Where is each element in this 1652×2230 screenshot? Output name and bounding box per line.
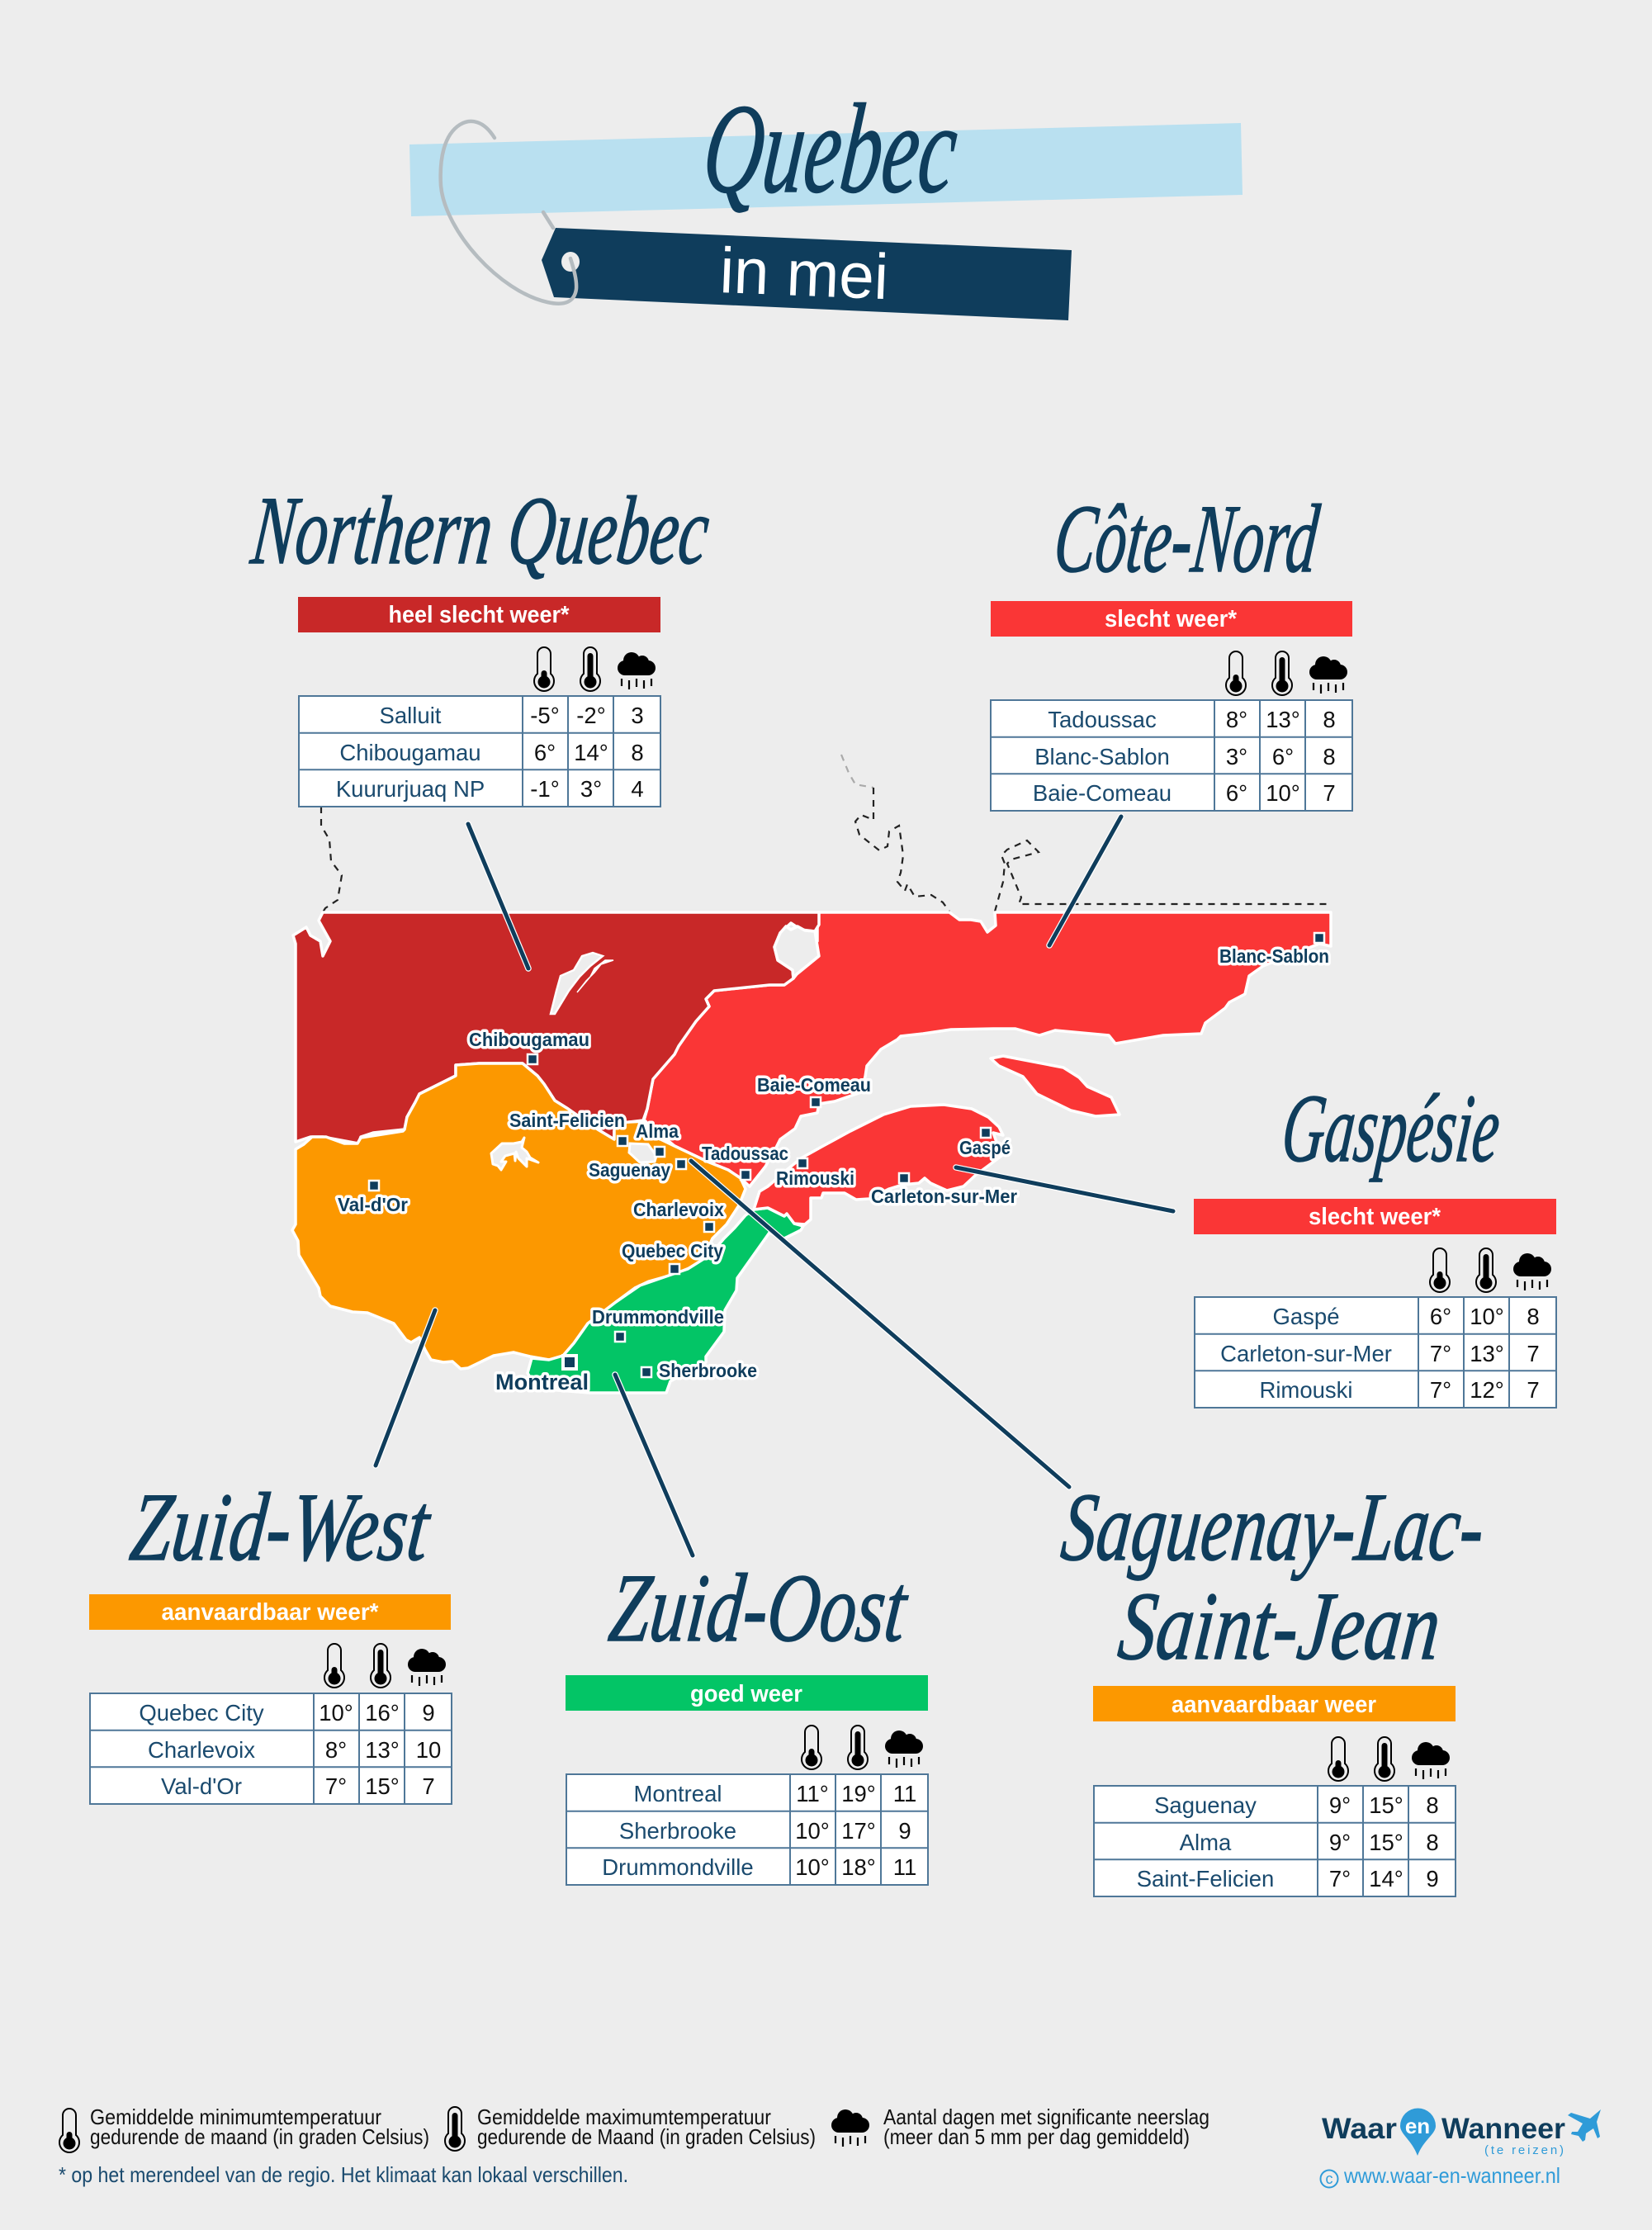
- climate table: 18°: [841, 1854, 876, 1880]
- climate table: 15°: [1369, 1830, 1403, 1855]
- table icons: [1328, 1737, 1450, 1781]
- legend: maximum temperature: gedurende de Maand (in graden Celsius): [477, 2124, 816, 2149]
- border: dashed Labrador east: [995, 840, 1332, 911]
- legend: precipitation: Aantal dagen met significante neerslag: [883, 2105, 1209, 2129]
- leader line: Cote-Nord: [1049, 817, 1121, 945]
- panel: Zuid-Oost: [566, 1554, 928, 1885]
- leader line: Zuid-Oost: [615, 1375, 693, 1555]
- climate table: Montreal: [634, 1781, 722, 1806]
- rating bar: heel slecht weer*: [388, 602, 570, 628]
- climate table: 8: [1323, 707, 1336, 732]
- climate table: 7: [1527, 1341, 1540, 1366]
- leader line: Gaspesie: [956, 1167, 1173, 1211]
- panel: Saguenay-Lac-Saint-Jean: [1057, 1473, 1489, 1896]
- legend: minimum temperature: Gemiddelde minimumtemperatuur: [90, 2105, 381, 2129]
- city labels: Alma: [636, 1120, 679, 1142]
- city labels: Blanc-Sablon: [1219, 945, 1329, 967]
- city labels: Baie-Comeau: [757, 1074, 871, 1096]
- climate table: 6°: [534, 740, 556, 765]
- lake Mistassini: [551, 953, 603, 1014]
- table icons: [802, 1726, 923, 1769]
- leader line: Saguenay: [691, 1161, 1069, 1487]
- climate table: 8: [1426, 1792, 1439, 1818]
- logo tagline: (te reizen): [1484, 2143, 1565, 2157]
- region: Zuid-West and Saguenay: [292, 1063, 746, 1369]
- legend: [59, 2105, 1209, 2187]
- heading: Saguenay-Lac-Saint-Jean: Saguenay-Lac-: [1057, 1473, 1489, 1581]
- city labels: Chibougamau: [469, 1029, 589, 1050]
- panel: Gaspesie: [1194, 1074, 1556, 1408]
- climate table: 3°: [1226, 744, 1247, 769]
- region: Northern Quebec: [293, 912, 819, 1143]
- legend: minimum temperature: [59, 2105, 429, 2152]
- climate table: Sherbrooke: [619, 1818, 736, 1844]
- climate table: Saint-Felicien: [1137, 1866, 1274, 1891]
- climate table: 8: [1323, 744, 1336, 769]
- climate table: [299, 696, 660, 807]
- leader line: Zuid-West: [376, 1310, 435, 1465]
- climate table: Charlevoix: [148, 1737, 255, 1763]
- city labels: Saguenay: [589, 1159, 670, 1181]
- rating bar: aanvaardbaar weer: [1172, 1692, 1376, 1718]
- panel: Cote-Nord: [991, 485, 1352, 811]
- border: dashed Labrador: [855, 788, 949, 911]
- legend: minimum temperature: gedurende de maand (in graden Celsius): [90, 2124, 429, 2149]
- map of Quebec: [292, 755, 1332, 1555]
- climate table: 8°: [325, 1737, 347, 1763]
- table icons: [1430, 1248, 1551, 1292]
- climate table: 9: [1426, 1866, 1439, 1891]
- climate table: 10°: [1470, 1304, 1504, 1329]
- city labels: Charlevoix: [633, 1199, 724, 1220]
- climate table: Quebec City: [139, 1700, 264, 1726]
- title ribbon: [409, 123, 1243, 216]
- climate table: 14°: [574, 740, 608, 765]
- region: Anticosti island: [991, 1056, 1119, 1116]
- climate table: 15°: [365, 1773, 400, 1799]
- climate table: [991, 700, 1352, 811]
- region: Cote-Nord: [644, 912, 1331, 1186]
- climate table: 10: [416, 1737, 441, 1763]
- climate table: Alma: [1180, 1830, 1232, 1855]
- climate table: -5°: [530, 703, 560, 728]
- climate table: 9°: [1329, 1830, 1351, 1855]
- legend: precipitation: [831, 2105, 1209, 2149]
- climate table: 17°: [841, 1818, 876, 1844]
- climate table: 7°: [1430, 1341, 1451, 1366]
- climate table: 10°: [319, 1700, 353, 1726]
- rating bar: aanvaardbaar weer*: [162, 1599, 379, 1626]
- climate table: [1094, 1786, 1456, 1896]
- climate table: 11: [893, 1854, 916, 1880]
- climate table: Gaspé: [1272, 1304, 1340, 1329]
- city labels: Carleton-sur-Mer: [871, 1186, 1017, 1207]
- city labels: [338, 945, 1329, 1394]
- climate table: 12°: [1470, 1377, 1504, 1403]
- climate table: 7: [1323, 780, 1336, 806]
- climate table: 3°: [580, 776, 602, 802]
- climate table: 8: [1527, 1304, 1540, 1329]
- logo text: Waar: [1322, 2113, 1397, 2145]
- logo text: [1322, 2113, 1565, 2145]
- climate table: 16°: [365, 1700, 400, 1726]
- city markers: [369, 933, 1324, 1377]
- climate table: Tadoussac: [1048, 707, 1157, 732]
- climate table: Carleton-sur-Mer: [1220, 1341, 1392, 1366]
- heading: Gaspesie: Gaspésie: [1277, 1074, 1505, 1182]
- climate table: -2°: [576, 703, 606, 728]
- logo: Waar en Wanneer: [1321, 2109, 1601, 2188]
- rating bar: goed weer: [690, 1681, 802, 1707]
- climate table: Salluit: [380, 703, 442, 728]
- heading: Saguenay-Lac-Saint-Jean: Saint-Jean: [1114, 1572, 1446, 1680]
- city labels: Rimouski: [776, 1167, 854, 1189]
- rating bar: [298, 597, 660, 632]
- heading: Quebec: Quebec: [697, 78, 963, 220]
- climate table: 9: [898, 1818, 911, 1844]
- climate table: 14°: [1369, 1866, 1403, 1891]
- climate table: 10°: [795, 1854, 830, 1880]
- lake Albanel: [577, 960, 613, 992]
- string loop: [441, 121, 576, 304]
- James Bay: [774, 926, 819, 978]
- city labels: Sherbrooke: [659, 1360, 757, 1381]
- subtitle: in mei: in mei: [718, 234, 890, 313]
- heading: Zuid-Oost: Zuid-Oost: [604, 1554, 913, 1662]
- climate table: 11: [893, 1781, 916, 1806]
- climate table: 7°: [1430, 1377, 1451, 1403]
- logo pin: [1400, 2109, 1436, 2156]
- heading: Zuid-West: Zuid-West: [125, 1473, 436, 1581]
- climate table: 4: [631, 776, 644, 802]
- border: dashed Labrador faded: [841, 755, 873, 788]
- region: Gaspesie: [754, 1105, 1003, 1224]
- climate table: 13°: [365, 1737, 400, 1763]
- climate table: 10°: [795, 1818, 830, 1844]
- panel: Northern Quebec: [247, 476, 714, 807]
- climate table: Val-d'Or: [161, 1773, 242, 1799]
- city labels: Drummondville: [592, 1306, 724, 1328]
- city labels: Saint-Felicien: [509, 1110, 625, 1131]
- climate table: Drummondville: [602, 1854, 754, 1880]
- climate table: 9: [422, 1700, 435, 1726]
- climate table: Baie-Comeau: [1033, 780, 1172, 806]
- climate table: [566, 1774, 928, 1885]
- city labels: Val-d'Or: [338, 1194, 408, 1215]
- rating bar: [991, 601, 1352, 637]
- rating bar: slecht weer*: [1309, 1204, 1441, 1230]
- region: Zuid-Oost: [528, 1208, 803, 1393]
- legend: precipitation: (meer dan 5 mm per dag gemiddeld): [883, 2124, 1190, 2149]
- leader line: Northern Quebec: [468, 824, 528, 968]
- heading: Saguenay-Lac-Saint-Jean: [1057, 1473, 1489, 1680]
- tag hole: [561, 252, 580, 272]
- climate table: 6°: [1226, 780, 1247, 806]
- heading: Northern Quebec: Northern Quebec: [247, 476, 714, 585]
- legend: maximum temperature: Gemiddelde maximumtemperatuur: [477, 2105, 771, 2129]
- rating bar: [1093, 1686, 1456, 1721]
- climate table: 15°: [1369, 1792, 1403, 1818]
- climate table: 7°: [325, 1773, 347, 1799]
- border: dashed north-west: [321, 807, 342, 912]
- climate table: 7: [422, 1773, 435, 1799]
- climate table: 9°: [1329, 1792, 1351, 1818]
- climate table: 8: [1426, 1830, 1439, 1855]
- climate table: Blanc-Sablon: [1034, 744, 1170, 769]
- climate table: 19°: [841, 1781, 876, 1806]
- city labels: Montreal: [495, 1370, 589, 1394]
- climate table: 8°: [1226, 707, 1247, 732]
- climate table: Chibougamau: [339, 740, 481, 765]
- climate table: 8: [631, 740, 644, 765]
- city labels: Tadoussac: [702, 1143, 788, 1164]
- rating bar: [1194, 1199, 1556, 1234]
- climate table: Kuururjuaq NP: [336, 776, 485, 802]
- climate table: Rimouski: [1259, 1377, 1353, 1403]
- city labels: Gaspé: [959, 1137, 1011, 1158]
- table icons: [1226, 651, 1347, 695]
- icon: plane: [1568, 2109, 1601, 2142]
- climate table: 13°: [1470, 1341, 1504, 1366]
- rating bar: [566, 1675, 928, 1711]
- climate table: 6°: [1272, 744, 1294, 769]
- table icons: [324, 1644, 446, 1688]
- climate table: [90, 1693, 452, 1804]
- climate table: Saguenay: [1154, 1792, 1257, 1818]
- panel: Zuid-West: [89, 1473, 452, 1804]
- climate table: [1195, 1297, 1556, 1408]
- table icons: [534, 647, 656, 691]
- price tag: [542, 228, 1072, 320]
- rating bar: slecht weer*: [1105, 606, 1238, 632]
- title banner: [409, 78, 1243, 320]
- logo text: en: [1405, 2114, 1430, 2138]
- copyright and URL: www.waar-en-wanneer.nl: [1343, 2163, 1560, 2188]
- climate table: 7°: [1329, 1866, 1351, 1891]
- rating bar: [89, 1594, 451, 1630]
- logo text: Wanneer: [1441, 2113, 1565, 2145]
- climate table: 6°: [1430, 1304, 1451, 1329]
- climate table: 13°: [1266, 707, 1300, 732]
- climate table: 11°: [796, 1781, 829, 1806]
- lake Gouin: [491, 1138, 538, 1170]
- city labels: Quebec City: [622, 1240, 723, 1262]
- legend: maximum temperature: [445, 2105, 816, 2151]
- heading: Cote-Nord: Côte-Nord: [1049, 485, 1324, 593]
- climate table: 10°: [1266, 780, 1300, 806]
- lake Saint-Jean gap: [629, 1143, 656, 1162]
- climate table: -1°: [530, 776, 560, 802]
- footnote: * op het merendeel van de regio. Het klimaat kan lokaal verschillen.: [59, 2162, 628, 2187]
- climate table: 3: [631, 703, 644, 728]
- copyright and URL: c: [1326, 2171, 1332, 2187]
- climate table: 7: [1527, 1377, 1540, 1403]
